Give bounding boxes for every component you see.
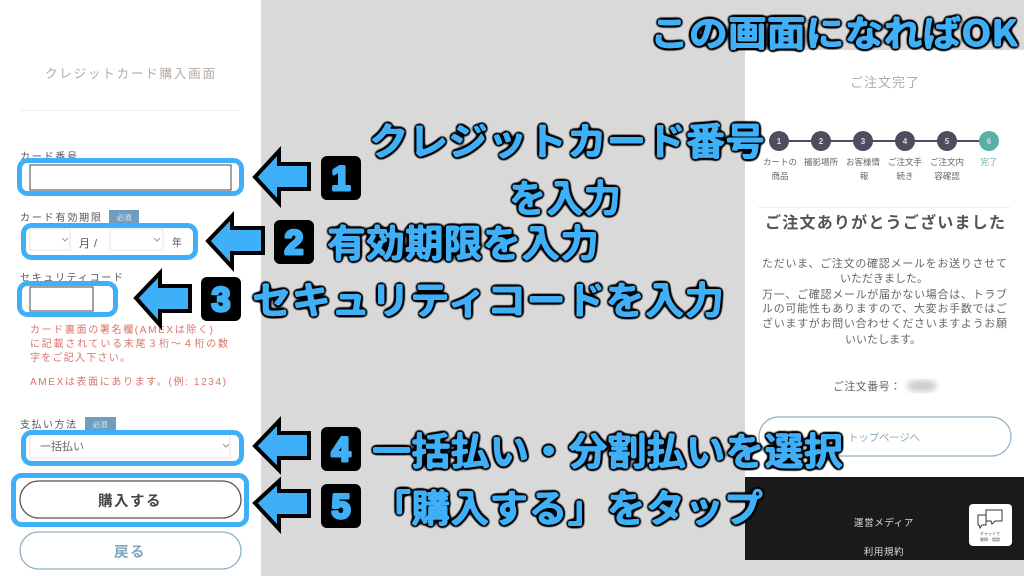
thanks body text: ルの可能性もありますので、大変お手数ではご: [762, 301, 1007, 315]
thanks body text: 万一、ご確認メールが届かない場合は、トラブ: [762, 287, 1007, 301]
highlight: payment method: [24, 432, 242, 464]
arrow 4: [255, 421, 309, 470]
thanks body text: いただきました。: [840, 272, 928, 285]
progress steps: 3: [861, 137, 866, 146]
security code note: カード裏面の署名欄(AMEXは除く): [30, 323, 213, 336]
progress steps: 商品: [771, 171, 789, 181]
expiry selects: /: [94, 238, 98, 250]
button: purchase: [20, 481, 241, 518]
thanks body text: ざいますがお問い合わせくださいますようお願: [762, 316, 1007, 330]
label: security code: セキュリティコード: [20, 272, 123, 284]
progress steps: [763, 131, 999, 181]
number badge 5: 5: [332, 488, 350, 526]
progress steps: 1: [777, 137, 782, 146]
panel: credit card form: [0, 0, 261, 576]
thanks heading: ご注文ありがとうございました: [765, 213, 1005, 232]
card number input: [30, 165, 231, 190]
step 5 text: 「購入する」をタップ: [372, 478, 763, 533]
number badge 4: 4: [332, 431, 351, 469]
progress steps: 撮影場所: [804, 157, 838, 167]
step 3 text: セキュリティコードを入力: [252, 270, 724, 325]
security code note: [30, 323, 228, 388]
progress steps: 続き: [896, 171, 914, 181]
number badge 5: [321, 484, 361, 528]
thanks body text: いいたします。: [845, 333, 921, 346]
thanks body text: ただいま、ご注文の確認メールをお送りさせて: [762, 256, 1007, 270]
progress steps: 2: [819, 137, 824, 146]
highlight: expiry: [24, 226, 196, 258]
number badge 1: [321, 156, 361, 200]
expiry selects: [30, 229, 182, 250]
number badge 3: [201, 277, 241, 321]
button: top page: [759, 417, 1011, 456]
number badge 1: 1: [332, 160, 350, 198]
payment select: [30, 434, 230, 458]
step 1 text: クレジットカード番号: [369, 111, 765, 166]
step 2 text: 有効期限を入力: [327, 213, 599, 268]
label: card number: カード番号: [20, 151, 77, 163]
progress steps: 容確認: [934, 171, 960, 181]
panel: order complete: [745, 50, 1024, 478]
progress steps: カートの: [763, 157, 797, 167]
highlight: purchase button: [14, 476, 246, 524]
order number: ご注文番号：: [833, 379, 901, 393]
security code note: 字をご記入下さい。: [30, 351, 130, 364]
payment select: 一括払い: [40, 439, 84, 453]
highlight: card number: [20, 160, 242, 194]
step 1 text: を入力: [509, 168, 621, 223]
step 1 text: [369, 111, 765, 223]
label: payment method: 支払い方法: [20, 418, 76, 431]
label: expiry: カード有効期限: [20, 211, 101, 224]
number badge 3: 3: [212, 281, 230, 319]
progress steps: 6: [987, 137, 992, 146]
number badge 4: [321, 427, 361, 471]
progress steps: 完了: [980, 157, 998, 167]
order complete title: ご注文完了: [850, 75, 920, 90]
progress steps: 4: [903, 137, 908, 146]
arrow 1: [255, 151, 309, 203]
arrow 5: [255, 481, 309, 529]
icon: chat button: チャットで: [980, 531, 1000, 536]
icon: chat button: 質問・相談: [980, 536, 1000, 542]
security code input: [30, 287, 93, 311]
expiry selects: 月: [79, 238, 90, 250]
badge: required payment: 必須: [92, 419, 108, 429]
thanks body text: [762, 256, 1007, 346]
progress steps: 5: [945, 137, 950, 146]
form title: クレジットカード購入画面: [45, 67, 215, 81]
heading: OK screen: この画面になればOK: [650, 5, 1018, 57]
number badge 2: [274, 220, 314, 264]
arrow 2: [208, 216, 263, 267]
number badge 2: 2: [285, 224, 303, 262]
panel: footer: 利用規約: [864, 546, 904, 558]
highlight: security code: [20, 284, 116, 314]
arrow 3: [136, 273, 190, 325]
badge: required payment: [85, 417, 116, 431]
security code note: AMEXは表面にあります。(例: 1234): [30, 375, 226, 388]
badge: required expiry: 必須: [116, 212, 132, 222]
progress steps: 報: [860, 171, 869, 181]
icon: chat button: [969, 504, 1012, 546]
progress steps: お客様情: [846, 157, 880, 167]
button: purchase: 購入する: [98, 492, 162, 510]
expiry selects: 年: [172, 236, 182, 249]
order number: [833, 379, 937, 393]
security code note: に記載されている末尾３桁～４桁の数: [30, 337, 228, 350]
button: back: 戻る: [114, 545, 146, 561]
panel: footer: 運営メディア: [854, 517, 914, 529]
button: top page: トップページへ: [848, 432, 920, 444]
button: back: [20, 532, 241, 569]
step 4 text: 一括払い・分割払いを選択: [372, 421, 843, 476]
progress steps: ご注文内: [930, 157, 964, 167]
badge: required expiry: [109, 210, 139, 223]
panel: footer: [745, 477, 1024, 560]
progress steps: ご注文手: [888, 157, 922, 167]
